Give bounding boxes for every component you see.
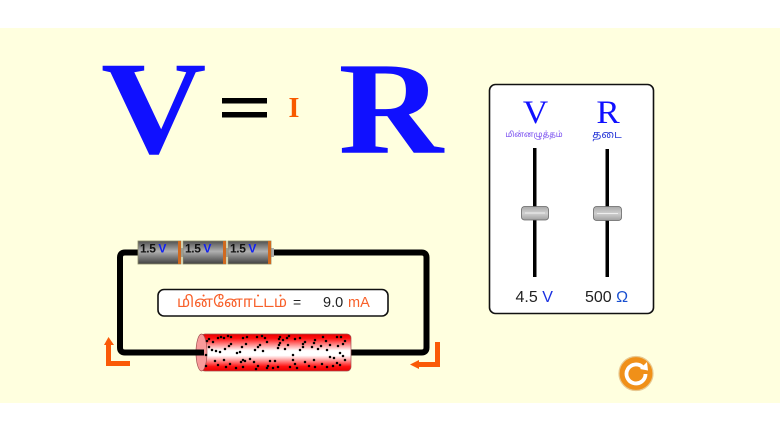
resistance slider [594, 149, 622, 277]
equals: = [293, 294, 301, 310]
current unit: mA [348, 295, 370, 311]
left current arrow [104, 337, 130, 366]
voltage label: மின்னழுத்தம் [505, 130, 563, 140]
equals sign [222, 98, 267, 118]
formula letter V: V [101, 36, 206, 182]
reset button [619, 356, 653, 390]
voltage heading: V [523, 95, 549, 131]
battery 2: 1.5 V [185, 242, 211, 256]
current value: 9.0 [323, 295, 343, 311]
battery 1: 1.5 V [140, 242, 166, 256]
batteries [138, 241, 274, 264]
formula: V = I R [101, 35, 445, 182]
resistance value: 500 Ω [585, 289, 628, 306]
resistance heading: R [596, 95, 620, 131]
formula letter I: I [288, 93, 299, 124]
current label: மின்னோட்டம் [177, 294, 287, 311]
circuit wire [120, 252, 426, 352]
resistor with electrons [190, 334, 351, 371]
resistance label: தடை [592, 129, 622, 142]
voltage slider [522, 148, 548, 277]
current readout [158, 290, 388, 316]
slider panel [490, 84, 654, 314]
battery 3: 1.5 V [230, 242, 256, 256]
voltage value: 4.5 V [516, 289, 553, 306]
formula letter R: R [338, 35, 445, 181]
right current arrow [410, 342, 440, 369]
electrons [206, 336, 345, 369]
